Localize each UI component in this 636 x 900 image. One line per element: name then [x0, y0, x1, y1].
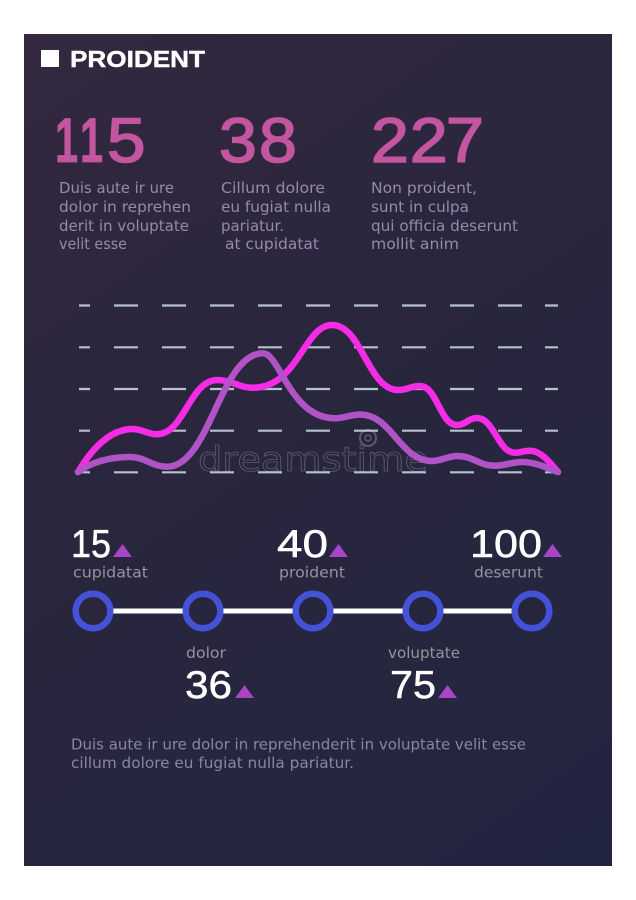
stat: 227: 227 [371, 105, 484, 175]
timeline node 4 [406, 594, 440, 628]
metric: 15 cupidatat: cupidatat [73, 564, 148, 582]
metric: 75 voluptate [388, 645, 460, 707]
timeline node 3 [296, 594, 330, 628]
metric: 100 deserunt [470, 523, 562, 582]
icon: white square [41, 50, 59, 67]
footer text [71, 736, 526, 772]
stat: 38: 38 [219, 105, 297, 175]
metric: 36 dolor: dolor [186, 645, 227, 662]
timeline node 2 [186, 594, 220, 628]
metric: 75 voluptate: 75 [390, 664, 436, 707]
footer text: cillum dolore eu fugiat nulla pariatur. [71, 755, 354, 772]
stat: 115: dolor in reprehen [59, 199, 191, 216]
stat: 115: derit in voluptate [59, 218, 189, 235]
stat: 227: qui officia deserunt [371, 218, 518, 235]
metric: 100 deserunt: deserunt [474, 564, 543, 582]
watermark: dreamstime [198, 440, 428, 480]
metric: 40 proident: 40 [277, 523, 328, 566]
footer text: Duis aute ir ure dolor in reprehenderit in voluptate velit esse [71, 736, 526, 754]
pink series line [78, 325, 558, 472]
stat: 115 [55, 106, 191, 253]
purple series line [78, 353, 558, 472]
stat: 115: velit esse [59, 236, 127, 253]
metric: 40 proident [277, 523, 348, 582]
metric: 36 dolor: 36 [185, 664, 232, 707]
title: PROIDENT [70, 46, 206, 72]
stat: 115: 1 [55, 107, 78, 176]
stat: 38: pariatur. [221, 218, 284, 235]
metric: 100 deserunt: 100 [470, 523, 542, 566]
metric: 36 dolor [185, 645, 254, 707]
stat: 115: Duis aute ir ure [59, 180, 174, 197]
stat: 227: Non proident, [371, 180, 477, 197]
timeline node 1 [76, 594, 110, 628]
timeline [76, 594, 549, 628]
metric: 40 proident: proident [279, 564, 345, 582]
stat: 227: sunt in culpa [371, 199, 469, 216]
metric: 75 voluptate: voluptate [388, 645, 460, 662]
line chart [78, 306, 558, 480]
metric: 15 cupidatat [71, 523, 148, 582]
stat: 227: mollit anim [371, 236, 459, 253]
stat: 38: Cillum dolore [221, 180, 325, 197]
stat: 38: at cupidatat [225, 236, 319, 253]
header [41, 46, 206, 72]
stat: 38: eu fugiat nulla [221, 199, 331, 216]
metric: 15 cupidatat: 15 [71, 523, 111, 566]
stat: 38 [219, 105, 331, 253]
stat: 227 [371, 105, 518, 253]
stat: 115: 1 [80, 107, 103, 176]
timeline node 5 [515, 594, 549, 628]
stat: 115: 5 [107, 106, 146, 176]
